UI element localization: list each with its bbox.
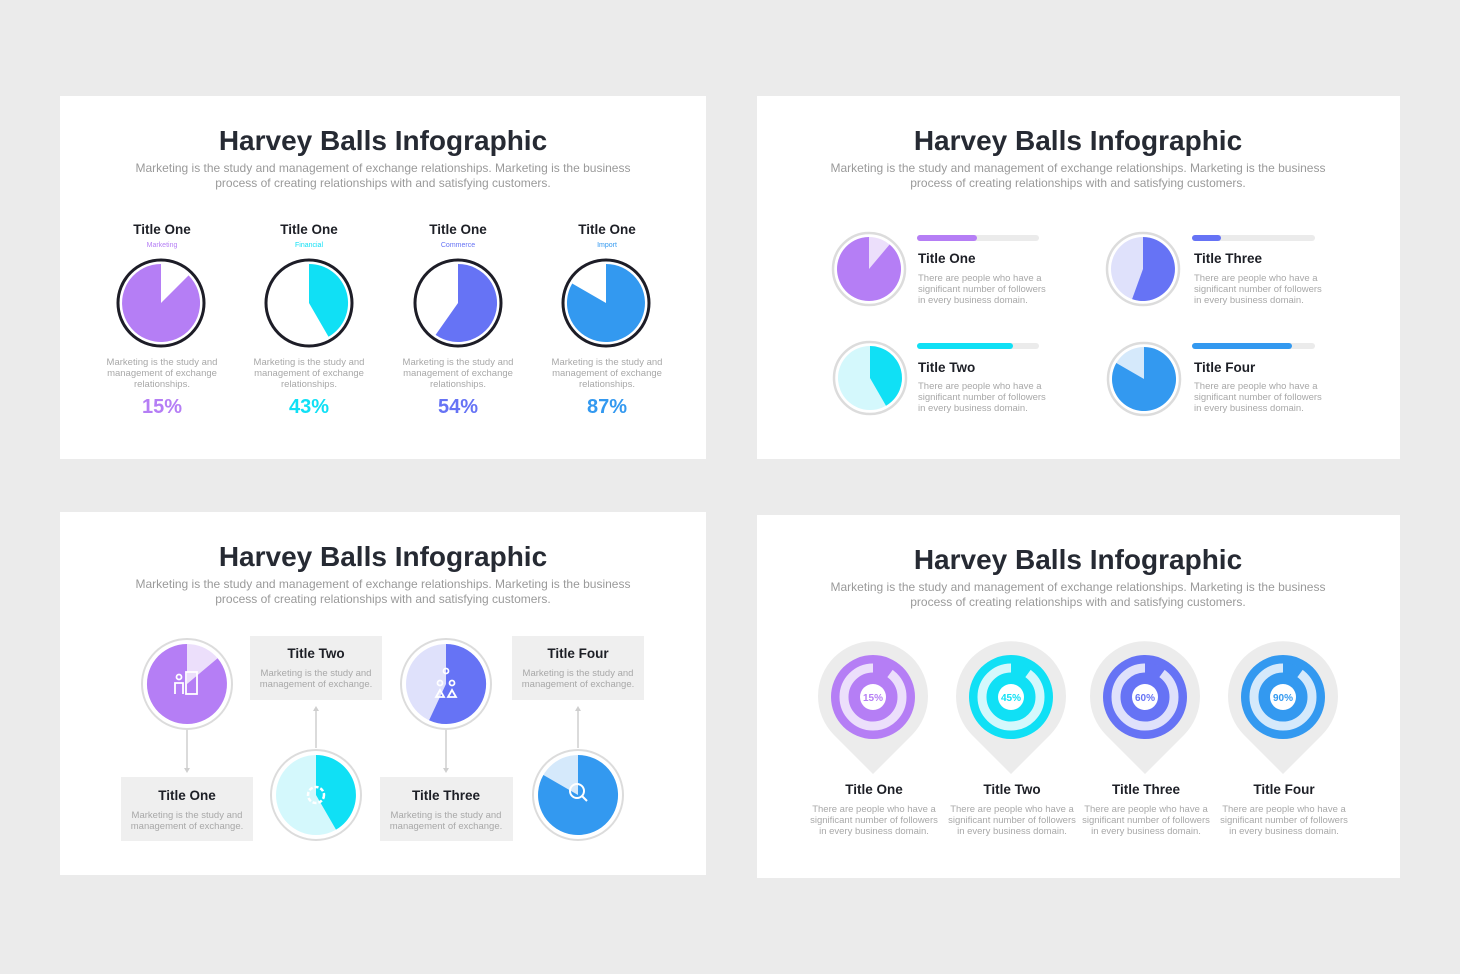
panel: top-right balls with bars bbox=[757, 96, 1400, 459]
item: 87% bbox=[552, 222, 662, 418]
item: 87%: management of exchange bbox=[552, 368, 662, 379]
item: 43%: Financial bbox=[295, 242, 323, 249]
subtitle: process of creating relationships with and satisfying customers. bbox=[910, 176, 1246, 190]
item: title two: in every business domain. bbox=[918, 403, 1028, 414]
item: title two: management of exchange. bbox=[260, 679, 372, 690]
item: title four: significant number of followers bbox=[1194, 392, 1322, 403]
item: title three: management of exchange. bbox=[390, 821, 502, 832]
item: 54%: Title One bbox=[429, 222, 487, 237]
item: 15% bbox=[107, 222, 217, 418]
item: 87%: relationships. bbox=[579, 379, 635, 390]
subtitle: Marketing is the study and management of exchange relationships. Marketing is the business bbox=[831, 580, 1325, 594]
item: title two bbox=[834, 342, 1046, 414]
item: title one: Title One bbox=[158, 788, 216, 803]
pin: 90% bbox=[1220, 641, 1348, 837]
panel: top-left pies bbox=[60, 96, 706, 459]
item: 15%: Marketing bbox=[147, 242, 177, 249]
pin: 60%: in every business domain. bbox=[1091, 826, 1201, 837]
item: 43%: Marketing is the study and bbox=[254, 357, 364, 368]
subtitle: process of creating relationships with and satisfying customers. bbox=[215, 176, 551, 190]
pin: 45%: in every business domain. bbox=[957, 826, 1067, 837]
pin: 45%: There are people who have a bbox=[950, 804, 1075, 815]
item: 15%: Title One bbox=[133, 222, 191, 237]
item: title two: significant number of followers bbox=[918, 392, 1046, 403]
item: title one: management of exchange. bbox=[131, 821, 243, 832]
pin: 90%: in every business domain. bbox=[1229, 826, 1339, 837]
pin: 15%: There are people who have a bbox=[812, 804, 937, 815]
item: title one: There are people who have a bbox=[918, 273, 1042, 284]
heading: Harvey Balls Infographic bbox=[219, 125, 547, 156]
item: title four: There are people who have a bbox=[1194, 381, 1318, 392]
item: 87%: Import bbox=[597, 242, 617, 249]
item: title one: significant number of followers bbox=[918, 284, 1046, 295]
pin: 90%: There are people who have a bbox=[1222, 804, 1347, 815]
item: 54%: Commerce bbox=[441, 242, 475, 249]
item: title three: Title Three bbox=[1194, 251, 1263, 266]
pin: 60%: significant number of followers bbox=[1082, 815, 1210, 826]
item: 15%: 15% bbox=[142, 396, 182, 418]
pin: 45% bbox=[948, 641, 1076, 837]
pin: 60%: There are people who have a bbox=[1084, 804, 1209, 815]
item: 87%: Title One bbox=[578, 222, 636, 237]
pin: 60%: Title Three bbox=[1112, 782, 1180, 797]
item: 43%: relationships. bbox=[281, 379, 337, 390]
item: title two: Marketing is the study and bbox=[261, 668, 371, 679]
pin: 90%: significant number of followers bbox=[1220, 815, 1348, 826]
item: title four bbox=[1108, 343, 1322, 415]
item: 87%: 87% bbox=[587, 396, 627, 418]
item: 54%: Marketing is the study and bbox=[403, 357, 513, 368]
subtitle: Marketing is the study and management of exchange relationships. Marketing is the business bbox=[136, 161, 630, 175]
arrows bbox=[184, 706, 581, 773]
pin: 15%: significant number of followers bbox=[810, 815, 938, 826]
item: title two: Title Two bbox=[918, 360, 975, 375]
panel: bottom-right pins bbox=[757, 515, 1400, 878]
item: title two: Title Two bbox=[287, 646, 345, 661]
pin: 60%: 60% bbox=[1135, 693, 1155, 704]
pin: 90%: 90% bbox=[1273, 693, 1293, 704]
heading: Harvey Balls Infographic bbox=[914, 125, 1242, 156]
item: title one: Title One bbox=[918, 251, 976, 266]
item: title one bbox=[833, 233, 1046, 306]
item: title three bbox=[380, 639, 513, 841]
pin: 15%: in every business domain. bbox=[819, 826, 929, 837]
item: 54% bbox=[403, 222, 513, 418]
item: 15%: relationships. bbox=[134, 379, 190, 390]
item: title four: Title Four bbox=[547, 646, 609, 661]
panel: bottom-left alternating flow bbox=[60, 512, 706, 875]
heading: Harvey Balls Infographic bbox=[219, 541, 547, 572]
item: 43%: Title One bbox=[280, 222, 338, 237]
item: 54%: relationships. bbox=[430, 379, 486, 390]
item: title three: Marketing is the study and bbox=[391, 810, 501, 821]
item: 43% bbox=[254, 222, 364, 418]
item: title four: in every business domain. bbox=[1194, 403, 1304, 414]
pin: 15%: 15% bbox=[863, 693, 883, 704]
item: title four bbox=[512, 636, 644, 840]
item: 15%: Marketing is the study and bbox=[107, 357, 217, 368]
item: title four: management of exchange. bbox=[522, 679, 634, 690]
item: title four: Title Four bbox=[1194, 360, 1256, 375]
item: title three: Title Three bbox=[412, 788, 480, 803]
item: 43%: 43% bbox=[289, 396, 329, 418]
item: 54%: management of exchange bbox=[403, 368, 513, 379]
pin: 45%: 45% bbox=[1001, 693, 1021, 704]
subtitle: process of creating relationships with and satisfying customers. bbox=[910, 595, 1246, 609]
item: title three: There are people who have a bbox=[1194, 273, 1318, 284]
item: 87%: Marketing is the study and bbox=[552, 357, 662, 368]
pin: 15% bbox=[810, 641, 938, 837]
subtitle: Marketing is the study and management of exchange relationships. Marketing is the business bbox=[831, 161, 1325, 175]
pin: 45%: Title Two bbox=[983, 782, 1041, 797]
item: 15%: management of exchange bbox=[107, 368, 217, 379]
heading: Harvey Balls Infographic bbox=[914, 544, 1242, 575]
pin: 45%: significant number of followers bbox=[948, 815, 1076, 826]
pin: 90%: Title Four bbox=[1253, 782, 1315, 797]
item: title two: There are people who have a bbox=[918, 381, 1042, 392]
item: title four: Marketing is the study and bbox=[523, 668, 633, 679]
item: title two bbox=[250, 636, 382, 840]
subtitle: process of creating relationships with and satisfying customers. bbox=[215, 592, 551, 606]
item: title one: Marketing is the study and bbox=[132, 810, 242, 821]
item: 43%: management of exchange bbox=[254, 368, 364, 379]
item: title three: significant number of followers bbox=[1194, 284, 1322, 295]
item: title one: in every business domain. bbox=[918, 295, 1028, 306]
item: title one bbox=[121, 639, 253, 841]
subtitle: Marketing is the study and management of exchange relationships. Marketing is the business bbox=[136, 577, 630, 591]
pin: 60% bbox=[1082, 641, 1210, 837]
item: 54%: 54% bbox=[438, 396, 478, 418]
item: title three bbox=[1107, 233, 1322, 306]
item: title three: in every business domain. bbox=[1194, 295, 1304, 306]
pin: 15%: Title One bbox=[845, 782, 903, 797]
